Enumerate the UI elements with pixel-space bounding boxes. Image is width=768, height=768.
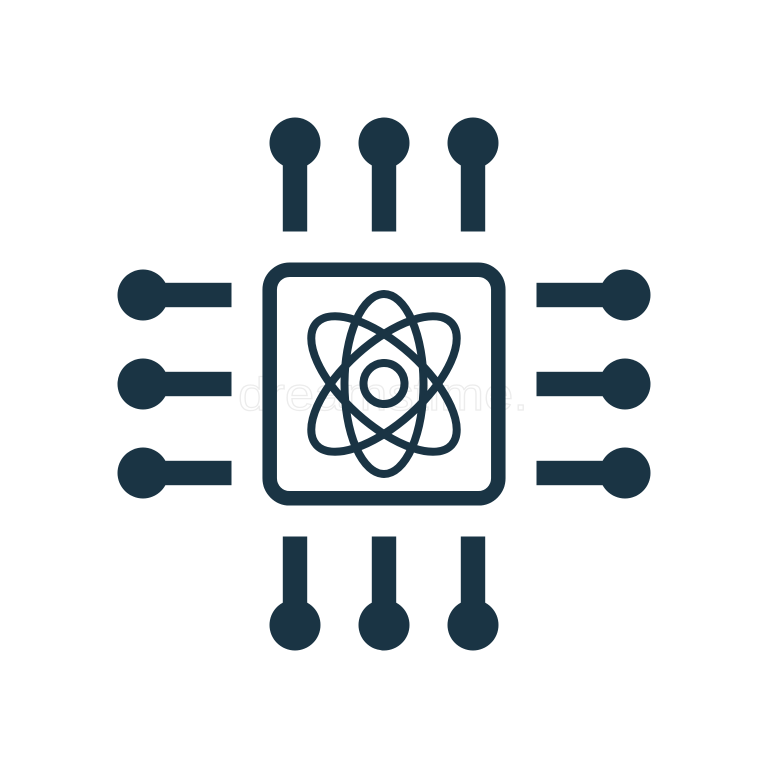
left pins	[118, 270, 232, 498]
right pins	[536, 270, 650, 498]
chip body	[270, 270, 498, 498]
atom symbol	[290, 293, 478, 475]
bottom pins	[270, 536, 498, 650]
top pins	[270, 118, 498, 232]
watermark: dreamstime.	[238, 368, 528, 420]
